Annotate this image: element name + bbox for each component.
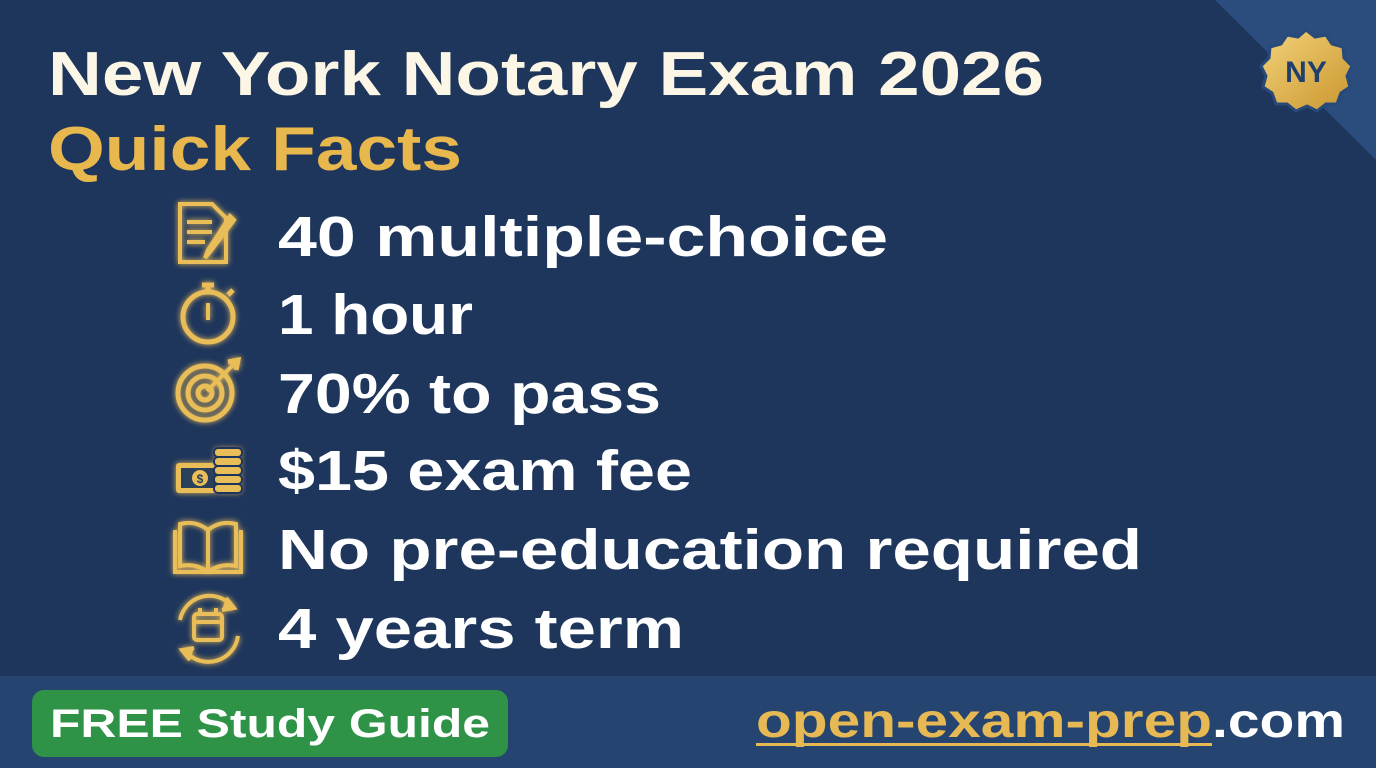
footer bar [0,676,1376,768]
icon: open book [175,523,241,572]
fact: time: 1 hour [278,283,473,347]
fact: term: 4 years term [278,597,684,661]
fact: pass score: 70% to pass [278,362,661,426]
icon: calendar cycle [180,596,238,662]
website url [756,695,1345,748]
website url: open-exam-prep [756,695,1212,748]
icon: money and coins [176,448,242,493]
badge: NY [1261,30,1352,111]
icon: stopwatch [183,285,233,342]
button: FREE Study Guide: FREE Study Guide [50,702,490,746]
badge: NY: NY [1285,56,1327,89]
website url: .com [1212,695,1345,748]
title: New York Notary Exam 2026 [48,40,1044,109]
icon: money and coins: $ [197,472,204,486]
fact: questions: 40 multiple-choice [278,205,888,269]
fact: education: No pre-education required [278,518,1142,582]
subtitle: Quick Facts [48,115,462,184]
button: FREE Study Guide [32,690,508,757]
fact: fee: $15 exam fee [278,439,692,503]
icon: document with pencil [180,204,234,262]
fact list [175,204,1142,662]
icon: target [178,360,238,420]
